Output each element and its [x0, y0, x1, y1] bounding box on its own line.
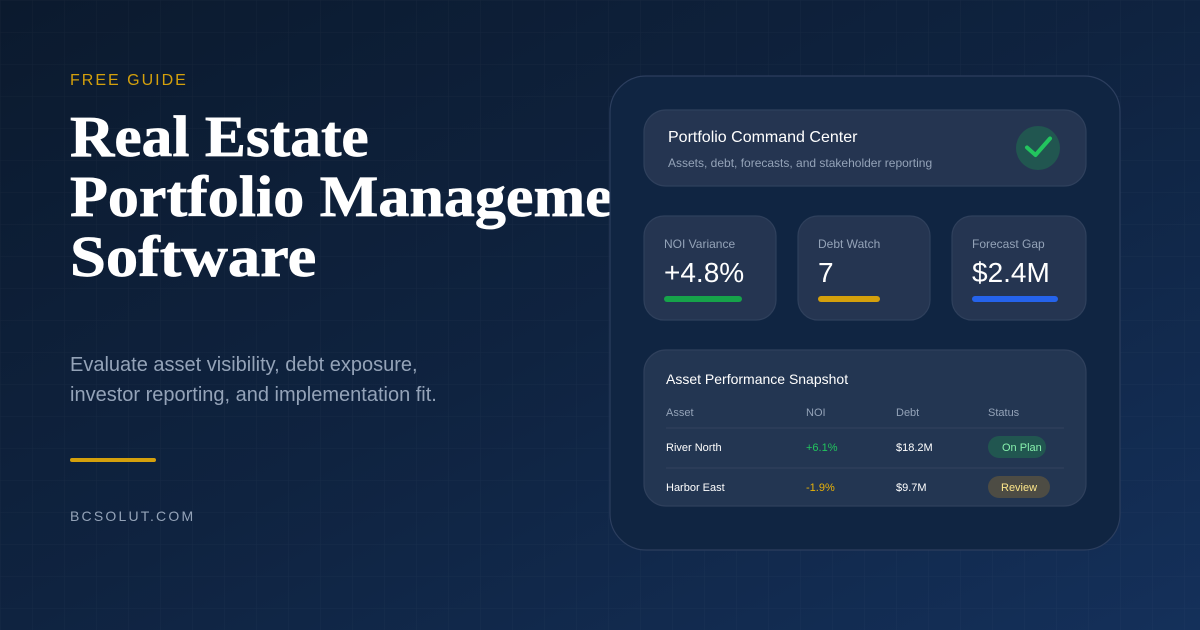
table row: Harbor East: $9.7M — [896, 482, 927, 494]
table row: River North: +6.1% — [806, 442, 838, 454]
metric value: +4.8% — [664, 257, 744, 288]
table row: Harbor East: -1.9% — [806, 482, 835, 494]
icon: check badge — [1016, 126, 1060, 170]
status pill: on plan — [988, 436, 1046, 458]
metric label: NOI Variance — [664, 237, 735, 251]
title: Real Estate — [70, 105, 369, 169]
panel: portfolio command center — [644, 110, 1086, 186]
panel: asset performance table — [644, 350, 1086, 506]
metric card: forecast gap — [952, 216, 1086, 320]
status pill: on plan: On Plan — [1002, 442, 1042, 454]
table row: River North: $18.2M — [896, 442, 933, 454]
subtitle — [70, 354, 437, 406]
title — [70, 105, 668, 289]
website url: BCSOLUT.COM — [70, 508, 195, 524]
subtitle: Evaluate asset visibility, debt exposure, — [70, 354, 418, 376]
table header row: Asset — [666, 407, 694, 419]
header title: Portfolio Command Center — [668, 129, 858, 146]
metric bar — [972, 296, 1058, 302]
table header row — [666, 407, 1020, 419]
table header row: Debt — [896, 407, 919, 419]
title: Portfolio Management — [70, 164, 668, 229]
table row: Harbor East: Harbor East — [666, 482, 725, 494]
metric label: Debt Watch — [818, 237, 880, 251]
metric card: NOI variance — [644, 216, 776, 320]
metric value: $2.4M — [972, 257, 1050, 288]
status pill: review — [988, 476, 1050, 498]
header subtitle: Assets, debt, forecasts, and stakeholder reporting — [668, 156, 932, 170]
accent divider — [70, 458, 156, 462]
metric bar — [818, 296, 880, 302]
table row: Harbor East — [666, 476, 1050, 498]
metric label: Forecast Gap — [972, 237, 1045, 251]
metric value: 7 — [818, 257, 834, 288]
panel: dashboard — [610, 76, 1120, 550]
table title: Asset Performance Snapshot — [666, 371, 848, 387]
table row: River North: River North — [666, 442, 722, 454]
table row: River North — [666, 436, 1046, 458]
table header row: Status — [988, 407, 1020, 419]
eyebrow: free guide: FREE GUIDE — [70, 72, 188, 89]
status pill: review: Review — [1001, 482, 1037, 494]
metric bar — [664, 296, 742, 302]
metric card: debt watch — [798, 216, 930, 320]
subtitle: investor reporting, and implementation fit. — [70, 384, 437, 406]
title: Software — [70, 225, 316, 289]
table header row: NOI — [806, 407, 826, 419]
